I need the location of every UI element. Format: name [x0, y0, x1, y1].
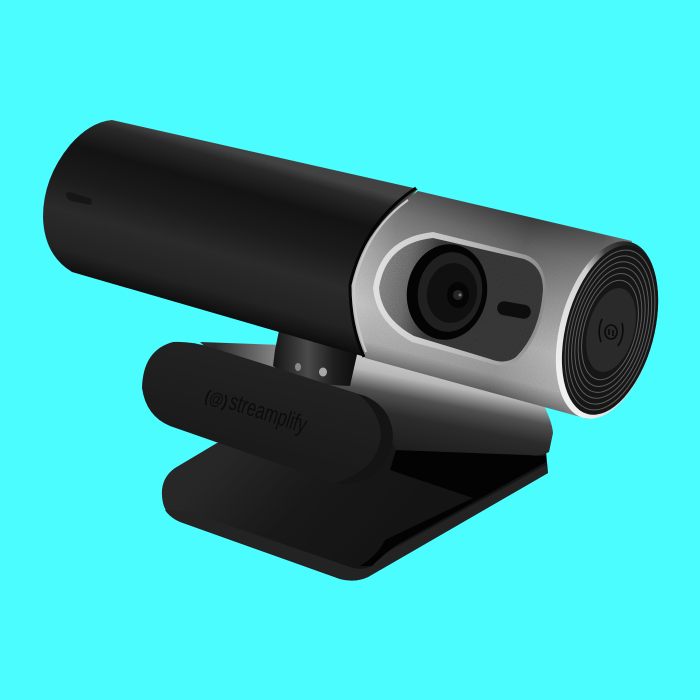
- swivel neck: [273, 326, 360, 386]
- window grain: [379, 238, 543, 362]
- neck ball highlights: [295, 363, 301, 371]
- status indicator: [496, 300, 532, 320]
- end cap: [538, 230, 676, 430]
- silver grain: [350, 191, 632, 419]
- base shadow recess: [360, 450, 546, 566]
- cap rings: [549, 240, 671, 420]
- lens: [399, 238, 495, 346]
- clip end shading: [335, 394, 393, 484]
- logo: streamplify: streamplify: [226, 388, 310, 439]
- base lower lip: [165, 465, 548, 581]
- cap logo: [599, 319, 623, 346]
- plate tip behind clip: [200, 342, 282, 372]
- silver cylinder: [350, 188, 676, 430]
- barrel slot: [66, 192, 92, 205]
- logo: streamplify: [202, 381, 310, 439]
- black barrel: [43, 120, 418, 356]
- hinge plate: [200, 342, 553, 456]
- webcam base foot: [162, 430, 548, 581]
- logo: streamplify: (@): [203, 386, 230, 412]
- window plate: [379, 238, 543, 362]
- seam ring: [350, 188, 416, 357]
- front clip with logo: [142, 342, 393, 484]
- seam highlight: [354, 200, 408, 352]
- lens window: [373, 232, 546, 365]
- barrel grain: [43, 120, 418, 356]
